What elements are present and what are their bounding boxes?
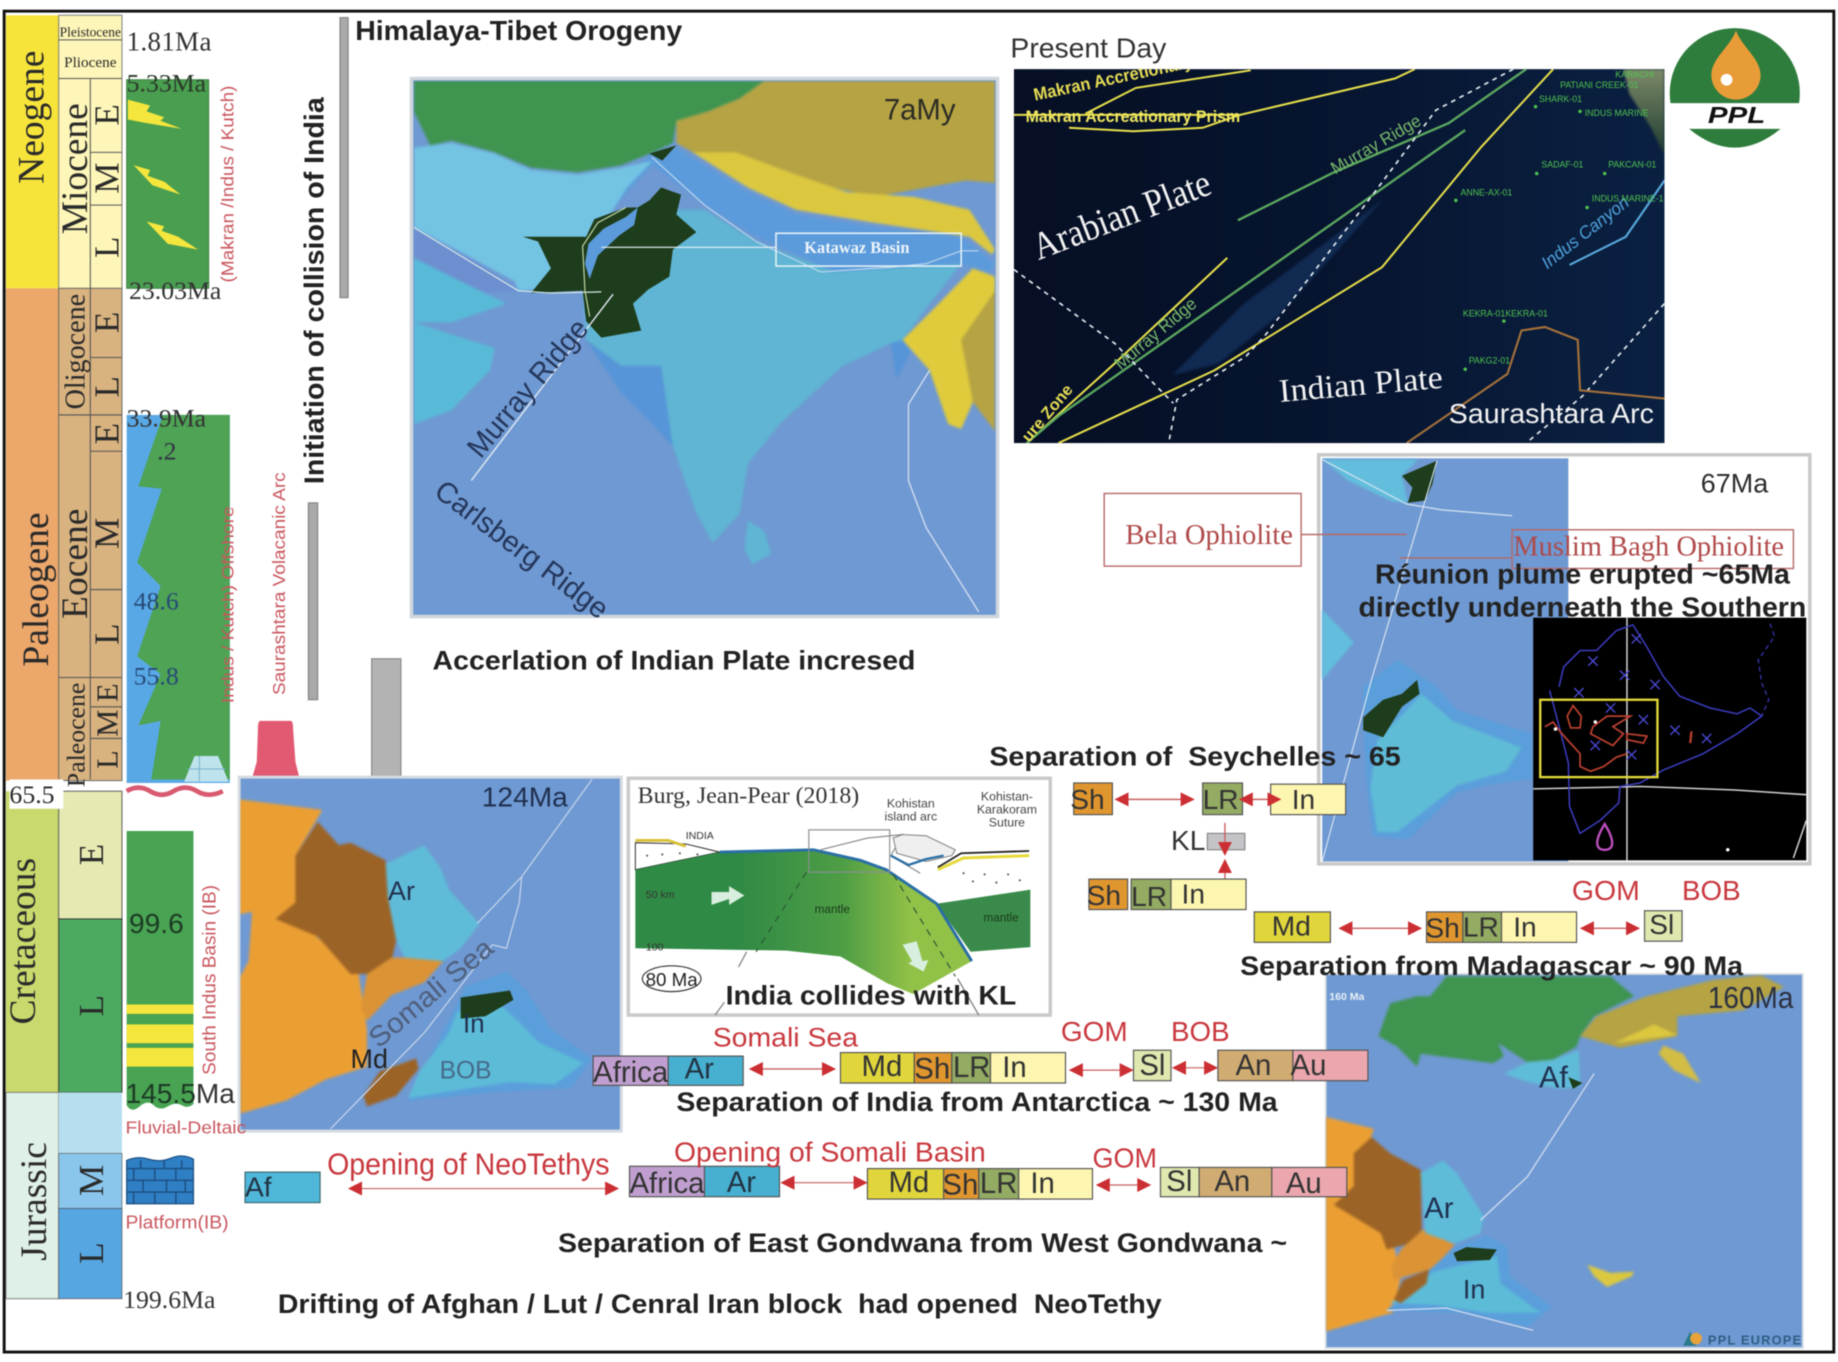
map: present day: Saurashtara Arc	[1449, 398, 1654, 429]
map: present day: Indus Canyon	[1537, 192, 1633, 273]
map: present day: SHARK-01	[1539, 94, 1582, 104]
callout: Katawaz Basin: Katawaz Basin	[804, 238, 909, 257]
map: 160Ma: In	[1463, 1275, 1485, 1305]
strat column: South Indus Basin: 99.6	[129, 908, 184, 939]
map: present day: ure Zone	[1018, 381, 1077, 446]
stage letters	[72, 104, 126, 1264]
age labels upper: 23.03Ma	[129, 276, 222, 305]
platform carbonate block	[125, 1156, 229, 1232]
caption: Drifting of Afghan: Drifting of Afghan / Lut / Cenral Iran block had opened NeoTethy	[278, 1289, 1162, 1319]
badge: 80 Ma: 80 Ma	[646, 969, 698, 990]
plate blocks: Somali Basin row: Sh	[942, 1168, 978, 1201]
period labels: Cretaceous	[3, 858, 44, 1025]
logo: PPL: PPL	[1708, 102, 1765, 128]
caption: Separation of India from Antarctica: Separation of India from Antarctica ~ 130 Ma	[676, 1087, 1279, 1117]
map: present day: INDUS MARINE	[1585, 108, 1649, 118]
plate blocks: Antarctica row: Ar	[685, 1052, 714, 1085]
section body: mantle	[815, 903, 850, 916]
period labels	[3, 51, 57, 1261]
stage letters: L	[72, 995, 111, 1016]
strat column: Makran / Indus / Kutch	[127, 80, 237, 288]
section body: 100	[646, 942, 664, 954]
map: 124Ma: Ar	[388, 876, 415, 906]
strat column: South Indus Basin: South Indus Basin (IB)	[199, 885, 220, 1075]
map: 160Ma	[1326, 974, 1803, 1348]
plate blocks: Somali Basin row: Md	[889, 1166, 929, 1199]
plate blocks: Antarctica row: Somali Sea	[713, 1023, 858, 1053]
plate blocks: Antarctica row: Sl	[1139, 1049, 1165, 1082]
plate blocks: Sh LR In	[1087, 879, 1246, 912]
epoch labels: Oligocene	[60, 294, 91, 409]
caption: Accerlation: Accerlation of Indian Plate incresed	[433, 645, 915, 675]
plate blocks: Madagascar row: Md	[1272, 910, 1311, 941]
callout: Bela Ophiolite: Bela Ophiolite	[1125, 520, 1293, 551]
plate blocks: Seychelles row: LR	[1203, 784, 1239, 815]
epoch labels: Paleocene	[61, 683, 90, 787]
label: Fluvial-Deltaic: Fluvial-Deltaic	[125, 1117, 246, 1137]
plate blocks: Somali Basin row	[629, 1137, 1347, 1201]
plate blocks: Antarctica row: Sh	[914, 1052, 950, 1085]
caption: Separation of East Gondwana: Separation of East Gondwana from West Gondwana ~	[558, 1228, 1287, 1258]
period labels: Neogene	[11, 51, 52, 184]
section body: 50 km	[646, 889, 675, 901]
plate blocks: Madagascar row: Sl	[1649, 909, 1674, 940]
plate blocks: Somali Basin row: Sl	[1166, 1165, 1192, 1198]
callout: Muslim Bagh Ophiolite: Muslim Bagh Ophiolite	[1513, 532, 1784, 563]
map: 124Ma: BOB	[440, 1057, 492, 1084]
section body	[635, 790, 1037, 1015]
section body: Kohistan-	[981, 790, 1033, 804]
map: present day: INDUS MARINE-1	[1592, 194, 1664, 204]
plate blocks: Somali Basin row: Opening of Somali Basin	[674, 1137, 986, 1168]
map: 124Ma: Somali Sea	[363, 932, 500, 1054]
plate blocks: Antarctica row: LR	[953, 1051, 990, 1084]
age labels upper: 5.33Ma	[127, 68, 207, 97]
stage letters: M	[87, 163, 126, 194]
plate blocks: Sh LR In: Sh	[1087, 880, 1121, 911]
panel: Burg cross-section	[628, 778, 1050, 1015]
65.5 age box: 65.5	[9, 780, 55, 809]
plate blocks: Antarctica row: Md	[862, 1050, 902, 1083]
plate blocks: Antarctica row: An	[1235, 1049, 1271, 1082]
map: present day: ANNE-AX-01	[1461, 188, 1512, 198]
stage letters: E	[87, 312, 126, 333]
map: 160Ma: Af	[1539, 1061, 1568, 1095]
Pakistan	[523, 188, 696, 338]
icon: volcanic arc plume	[249, 721, 302, 790]
label: Saurashtara Volcanic Arc: Saurashtara Volacanic Arc	[269, 472, 289, 695]
plate blocks: Madagascar row: BOB	[1682, 875, 1741, 906]
heading: Initiation of collision of India: Initiation of collision of India	[299, 97, 330, 484]
map: present day: PAKCAN-01	[1608, 160, 1656, 170]
plate blocks: Seychelles row: Sh	[1070, 784, 1105, 815]
map: 124Ma: Md	[351, 1044, 388, 1074]
section body: mantle	[983, 911, 1019, 924]
caption: Reunion plume	[1359, 559, 1806, 623]
map: 160Ma: 160 Ma	[1329, 991, 1365, 1003]
plate blocks: Sh LR In: LR	[1131, 881, 1167, 912]
map: present day: Arabian Plate	[1027, 162, 1217, 269]
plate blocks: Somali Basin row: Africa	[629, 1167, 705, 1200]
plate blocks: Seychelles row: In	[1292, 784, 1315, 815]
strat column: Indus / Kutch offshore: 33.9Ma	[127, 404, 207, 433]
section body: INDIA	[686, 830, 714, 842]
period labels: Paleogene	[16, 513, 57, 667]
period labels: Jurassic	[14, 1142, 55, 1261]
stage letters: L	[87, 376, 126, 398]
map: 7aMy: Murray Ridge	[461, 313, 595, 464]
plate blocks: Antarctica row: Africa	[593, 1056, 669, 1089]
inset: black map	[1533, 618, 1806, 860]
plate blocks: Somali Basin row: LR	[980, 1167, 1017, 1200]
plate block: KL: KL	[1171, 825, 1205, 856]
plate blocks: Madagascar row: GOM	[1572, 875, 1640, 906]
epoch labels	[55, 24, 121, 787]
plate blocks: Seychelles row	[1070, 783, 1346, 815]
plate block: KL	[1171, 823, 1245, 879]
timing bars	[308, 18, 401, 779]
plate block: Af	[245, 1172, 320, 1203]
map: 124Ma: In	[463, 1011, 485, 1039]
callout: Katawaz Basin	[601, 233, 961, 266]
stage letters: M	[87, 518, 126, 549]
map: present day: SADAF-01	[1541, 160, 1583, 170]
plate blocks: Somali Basin row: Ar	[727, 1166, 756, 1199]
plate blocks: Antarctica row	[593, 1016, 1368, 1089]
map: present day: KEKRA-01KEKRA-01	[1463, 308, 1548, 318]
map: present day: PATIANI CREEK-01	[1560, 80, 1639, 90]
section body: island arc	[884, 809, 937, 823]
callout: Bela Ophiolite	[1104, 493, 1407, 566]
plate blocks: Antarctica row: Au	[1291, 1049, 1326, 1082]
map: 7aMy: 7aMy	[884, 94, 956, 127]
stage letters: L	[90, 750, 124, 769]
map: 7aMy: Carlsberg Ridge	[428, 474, 615, 626]
map: 124Ma	[239, 777, 621, 1131]
map: present day: Makran Accreationary Prism	[1026, 108, 1240, 126]
plate blocks: Madagascar row: Sh	[1425, 913, 1460, 944]
heading: Himalaya-Tibet Orogeny: Himalaya-Tibet Orogeny	[355, 15, 683, 46]
age labels upper: 1.81Ma	[127, 26, 212, 56]
map: 67Ma: 67Ma	[1701, 468, 1768, 498]
section body: Karakoram	[977, 802, 1037, 816]
stage letters: L	[87, 237, 126, 258]
epoch labels: Eocene	[55, 509, 96, 619]
age label 199.6Ma: 199.6Ma	[123, 1285, 216, 1314]
caption: Separation from Madagascar: Separation from Madagascar ~ 90 Ma	[1240, 951, 1744, 981]
stage letters: M	[72, 1165, 111, 1196]
plate blocks: Madagascar row	[1254, 875, 1741, 944]
map: 124Ma: 124Ma	[482, 781, 568, 812]
map: 67Ma	[1319, 455, 1810, 864]
epoch labels: Miocene	[55, 103, 96, 234]
logo: PPL Europe watermark: PPL EUROPE	[1708, 1332, 1802, 1347]
plate block: Af: Af	[245, 1172, 272, 1203]
arrow: Opening of NeoTethys: Opening of NeoTethys	[327, 1147, 610, 1181]
strat column: Indus / Kutch offshore: .2	[157, 436, 176, 465]
plate blocks: Antarctica row: GOM	[1061, 1016, 1128, 1047]
section body: Suture	[989, 815, 1025, 829]
stage letters: E	[87, 423, 126, 444]
caption: Reunion plume: directly underneath the Southern	[1359, 592, 1806, 623]
map: present day: PAKG2-01	[1469, 355, 1510, 365]
panel: Burg cross-section: India collides with KL	[726, 981, 1016, 1011]
plate blocks: Antarctica row: In	[1002, 1051, 1027, 1084]
strat column: Indus / Kutch offshore	[127, 404, 237, 795]
section body: Kohistan	[887, 797, 935, 811]
stage letters: L	[87, 623, 126, 645]
epoch labels: Pliocene	[64, 54, 117, 71]
plate blocks: Somali Basin row: In	[1030, 1167, 1055, 1200]
plate blocks: Somali Basin row: An	[1214, 1165, 1250, 1198]
stage letters: E	[87, 104, 126, 126]
strat column: Indus / Kutch offshore: 48.6	[134, 587, 179, 616]
plate blocks: Sh LR In: In	[1182, 879, 1205, 910]
stage letters: E	[72, 844, 111, 865]
plate blocks: Madagascar row: LR	[1463, 912, 1499, 943]
plate blocks: Somali Basin row: GOM	[1092, 1142, 1157, 1173]
stage letters: M	[90, 710, 124, 737]
strat column: Makran / Indus / Kutch: (Makran /Indus / Kutch)	[217, 86, 237, 282]
callout: Muslim Bagh Ophiolite	[1400, 530, 1793, 568]
strat column: Indus / Kutch offshore: Indus / Kutch) Offshore	[218, 506, 237, 703]
platform carbonate block: Platform(IB)	[125, 1212, 229, 1232]
epoch labels: Pleistocene	[60, 24, 121, 39]
heading: Present Day: Present Day	[1010, 32, 1166, 63]
map: 7aMy	[411, 79, 998, 626]
strat column: South Indus Basin	[125, 831, 235, 1110]
logo: PPL	[1670, 28, 1800, 158]
map: 160Ma: Ar	[1424, 1192, 1454, 1225]
geologic timescale column	[3, 15, 126, 1299]
map: present day: KARACHI	[1615, 69, 1654, 79]
strat column: South Indus Basin: 145.5Ma	[125, 1078, 235, 1109]
map: present day: Indian Plate	[1278, 360, 1444, 410]
map: present day	[1014, 51, 1664, 446]
plate blocks: Somali Basin row: Au	[1286, 1167, 1322, 1200]
plate blocks: Antarctica row: BOB	[1171, 1016, 1230, 1047]
caption: Reunion plume: Réunion plume erupted ~65Ma	[1375, 559, 1790, 590]
plate blocks: Madagascar row: In	[1513, 912, 1537, 943]
age labels upper	[127, 26, 222, 305]
strat column: Indus / Kutch offshore: 55.8	[134, 662, 179, 691]
caption: Separation of Seychelles: Separation of Seychelles ~ 65	[989, 741, 1401, 771]
map: 160Ma: 160Ma	[1708, 981, 1793, 1015]
stage letters: L	[72, 1242, 111, 1264]
stage letters: E	[90, 683, 124, 702]
panel: Burg cross-section: Burg, Jean-Pear (2018)	[638, 783, 859, 809]
map: present day: Murray Ridge	[1110, 293, 1200, 373]
map: present day: Makran Accretionary	[1032, 51, 1194, 105]
map: present day: Murray Ridge	[1327, 110, 1424, 178]
